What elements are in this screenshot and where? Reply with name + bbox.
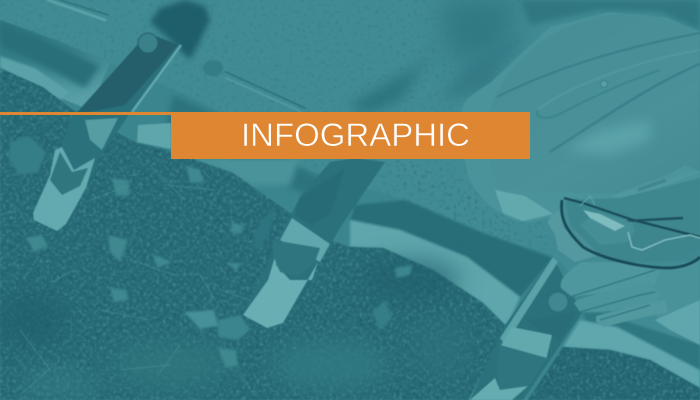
bar side strip: [267, 162, 385, 328]
light pipe, right: [563, 320, 700, 388]
hat brim: [461, 12, 700, 222]
shadow under middle slab edge: [165, 95, 345, 205]
finger 3: [596, 300, 668, 327]
area under glasses: [565, 178, 700, 262]
dirt smear at top of bar: [150, 0, 210, 60]
hat brim peak: [495, 190, 553, 221]
hard hat: [461, 12, 700, 222]
dark band under slab edge: [350, 200, 553, 297]
bar worn patch: [85, 118, 118, 150]
light pipe pieces: [0, 56, 70, 100]
upper hand: [547, 205, 600, 262]
bar worn patch: [280, 218, 330, 262]
ground, left: [0, 68, 507, 400]
shadow below left slab edge: [0, 24, 100, 88]
wrist: [640, 262, 700, 320]
light slab strip above dark band: [395, 160, 560, 257]
bar side strip: [67, 44, 182, 223]
bar worn patch: [500, 327, 552, 360]
bar tip: [33, 147, 95, 231]
hat reflection: [565, 120, 650, 155]
straw fibres: [0, 165, 255, 395]
slab grime: [0, 0, 700, 240]
bar tip: [243, 240, 318, 328]
orange rule: [0, 112, 171, 115]
hat ridges: [497, 33, 700, 97]
flat bar 3: [470, 257, 582, 400]
dark band, right: [583, 313, 700, 372]
title banner: [171, 112, 530, 159]
finger 2: [574, 282, 660, 312]
stones: [9, 137, 412, 368]
light pipe, centre: [350, 220, 520, 327]
ground tonal patches: [0, 260, 470, 397]
finger 1: [561, 262, 660, 297]
title: INFOGRAPHIC: [241, 117, 470, 153]
flat bar 1: [33, 33, 182, 231]
weld seams on slab: [48, 0, 305, 111]
safety glasses: [561, 196, 700, 268]
flat bar 2: [243, 158, 385, 328]
hat vent slot: [638, 180, 666, 190]
hat shell: [489, 14, 700, 194]
leather gloves: [547, 205, 700, 345]
ground, right: [528, 347, 700, 400]
